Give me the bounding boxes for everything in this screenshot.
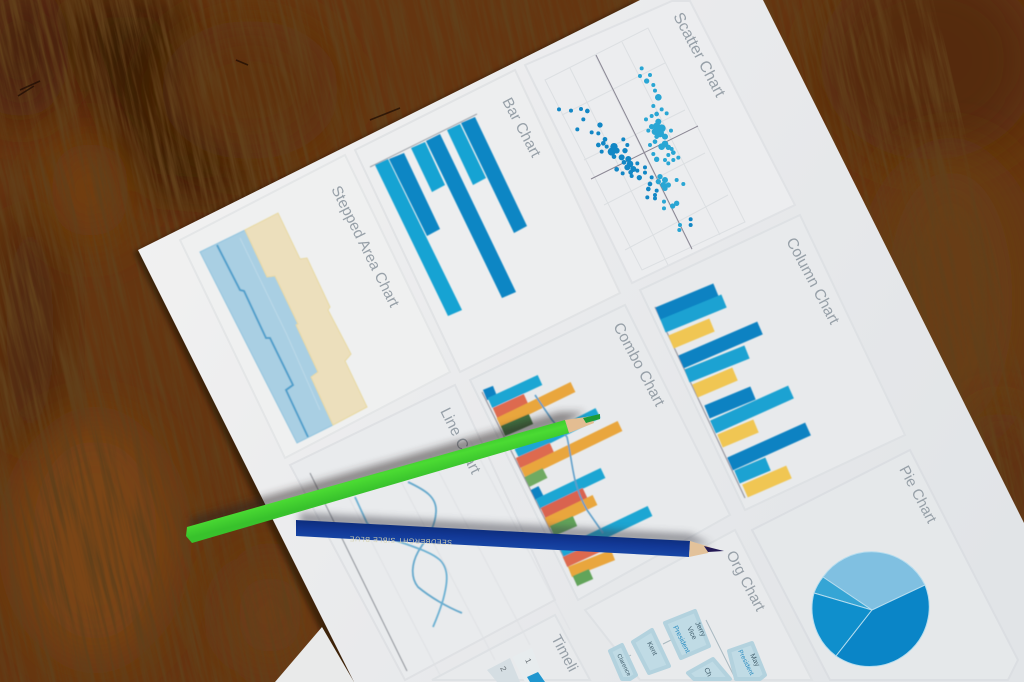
org box: Jerry: Jerry [693, 621, 707, 638]
panel: column chart card [640, 215, 905, 510]
blue pencil lead [704, 546, 724, 552]
column chart [655, 290, 808, 498]
org box: Jerry: Vice [685, 626, 698, 641]
heading: column: Column Chart [782, 235, 843, 328]
org box: partial lower box: Ch [702, 667, 713, 678]
org box: Clarence [610, 645, 636, 679]
chart headings [327, 10, 940, 675]
pencil imprint: SEEDBERGHT SIBLE BLUE [349, 534, 452, 545]
blue pencil [296, 520, 724, 557]
scatter points: light group [638, 66, 685, 232]
blue pencil shadow [300, 513, 712, 545]
pie chart [812, 552, 929, 666]
pencil shadows [190, 412, 712, 545]
org box: May [729, 643, 765, 679]
panel: org chart card [585, 530, 812, 680]
scatter grid [545, 28, 745, 270]
org box: Jerry [665, 611, 709, 658]
panel: scatter chart card [525, 1, 795, 283]
org chart [610, 611, 765, 679]
second sheet corner underneath [275, 627, 354, 682]
org box: Jerry: President [671, 625, 691, 654]
bar chart [370, 114, 527, 316]
panel: line chart card [290, 385, 555, 680]
stepped area chart [200, 213, 367, 443]
line chart [310, 440, 570, 675]
panel: stepped area chart card [180, 155, 450, 458]
green pencil [186, 414, 600, 543]
green pencil wood tip [565, 416, 594, 433]
panel: bar chart card [355, 70, 620, 372]
heading: line: Line Chart [436, 405, 484, 477]
yellow area [245, 213, 367, 425]
stepped line [217, 245, 308, 437]
org box: May: President [736, 649, 755, 677]
combo chart [482, 380, 650, 586]
timeline cells: 2 [498, 665, 508, 673]
green pencil shadow [190, 412, 585, 530]
org box: Kent [633, 630, 669, 673]
timeline cells [487, 648, 545, 682]
scatter axes [591, 55, 698, 249]
panel: combo chart card [470, 305, 730, 600]
heading: org: Org Chart [722, 548, 769, 615]
heading: combo: Combo Chart [609, 320, 668, 410]
scatter points: dark group [557, 107, 693, 227]
scatter chart [545, 28, 745, 270]
panel: timeline card [432, 615, 590, 680]
heading: scatter: Scatter Chart [669, 10, 728, 101]
line series two [355, 497, 447, 627]
blue pencil wood tip [689, 541, 710, 557]
heading: stepped area: Stepped Area Chart [327, 183, 403, 311]
line series one [408, 482, 462, 613]
heading: bar: Bar Chart [498, 95, 544, 161]
org box: Kent: Kent [645, 641, 658, 657]
green pencil lead [583, 414, 600, 423]
blue pencil body [296, 520, 690, 557]
org box: partial lower box [688, 659, 730, 679]
green pencil body [186, 420, 569, 543]
org box: Clarence: Clarence [615, 653, 632, 678]
combo trend line [535, 395, 603, 533]
org box: May: May [748, 653, 761, 668]
line chart axis [310, 473, 407, 671]
heading: pie: Pie Chart [895, 463, 940, 527]
timeline cells: 1 [523, 657, 533, 665]
panel: pie chart card [752, 450, 1018, 680]
heading: timeline (cut off by frame): Timeli [547, 632, 581, 675]
blue area [200, 230, 333, 443]
